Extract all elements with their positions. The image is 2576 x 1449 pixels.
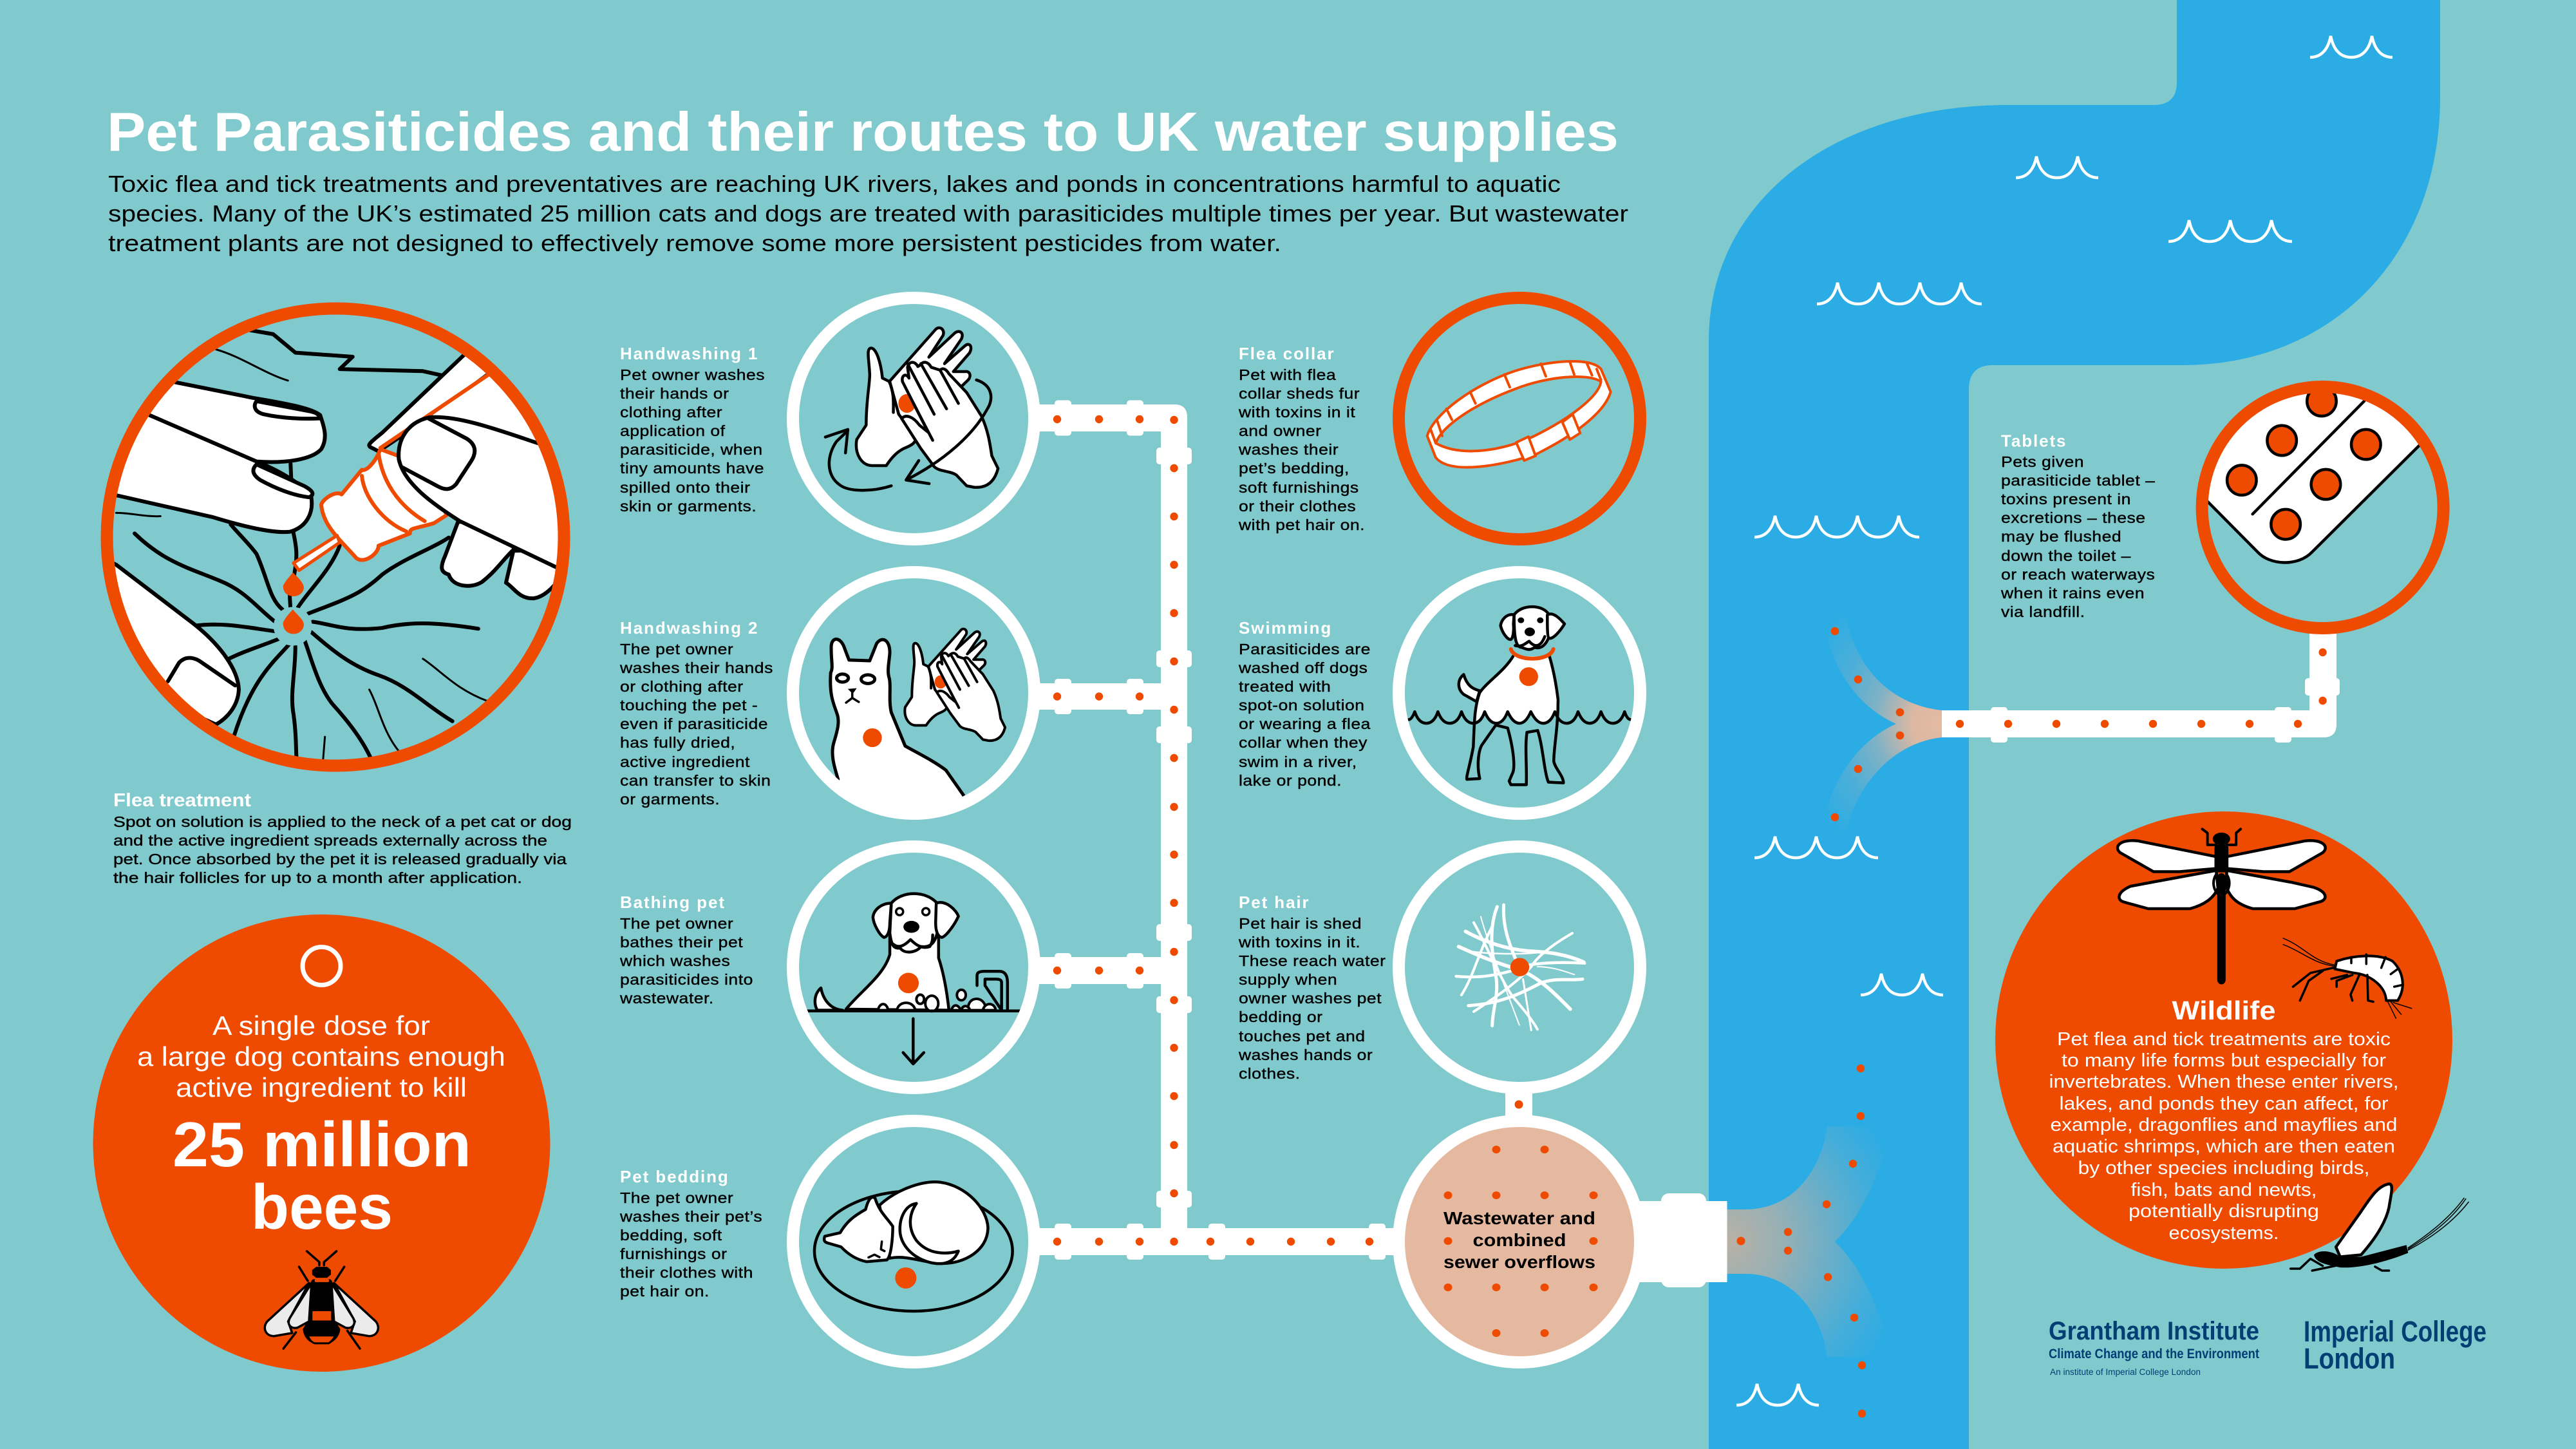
text: flea treatment: Flea treatment [113,790,251,811]
plume: tablets outfall [1819,610,1942,838]
ring: flea collar [1398,298,1641,540]
callout text: bees [251,1171,393,1242]
text: flea collar: pet’s bedding, [1239,460,1349,477]
text: flea treatment: Spot on solution is applied to the neck of a pet cat or dog [113,813,572,830]
wildlife text: by other species including birds, [2078,1158,2369,1179]
logo: Imperial College London: London [2304,1342,2395,1375]
panel: wastewater and combined sewer overflows [1398,1121,1727,1363]
text: bathing pet [619,893,753,1007]
text: bathing pet: which washes [619,952,730,970]
text: swimming: spot-on solution [1239,697,1365,714]
text: handwashing 1: application of [620,422,726,440]
ring: swimming [1398,572,1641,814]
wastewater tank [1398,1121,1641,1363]
text: tablets: Pets given [2001,453,2084,471]
text: pet bedding [619,1167,762,1300]
text: handwashing 1 [620,344,765,515]
wildlife text: fish, bats and newts, [2131,1180,2317,1200]
text: pet bedding: bedding, soft [620,1227,722,1244]
text: swimming: lake or pond. [1239,772,1342,790]
pipe network: pathways to wastewater [1030,401,1532,1260]
panel: handwashing 2 icon [793,572,1034,840]
text: flea collar: soft furnishings [1239,479,1359,497]
text: pet hair: touches pet and [1239,1028,1366,1045]
text: pet bedding: washes their pet’s [619,1208,762,1226]
text: tablets: when it rains even [2000,585,2145,602]
text: handwashing 2: Handwashing 2 [620,618,758,638]
ring: bathing pet [793,846,1034,1088]
ring: pet hair [1398,846,1641,1088]
text: handwashing 1: spilled onto their [620,479,750,497]
text: tablets: Tablets [2001,431,2067,451]
text: swimming: Parasiticides are [1239,641,1371,658]
text: handwashing 1: parasiticide, when [620,441,763,459]
text: tablets: parasiticide tablet – [2001,472,2155,489]
text: pet hair: clothes. [1239,1065,1301,1083]
icon: cat on bed [814,1182,1013,1311]
text: pet hair [1238,893,1386,1083]
text: pet hair: supply when [1239,971,1337,989]
text: tablets: or reach waterways [2001,566,2155,583]
text: swimming [1238,618,1371,790]
ring: handwashing 2 [793,572,1034,814]
text: handwashing 1: clothing after [620,404,722,421]
text: pet hair: washes hands or [1238,1046,1373,1064]
wildlife text: invertebrates. When these enter rivers, [2049,1072,2399,1092]
text: tablets [2000,431,2155,621]
text: flea collar: or their clothes [1239,498,1356,515]
text: pet hair: owner washes pet [1239,990,1382,1007]
callout text: 25 million [173,1109,471,1180]
river waves [1736,36,2393,1405]
panel: flea treatment illustration [94,308,589,766]
text: tablets: toxins present in [2001,491,2131,508]
text: handwashing 2: washes their hands [619,659,773,677]
text: flea collar [1238,344,1365,534]
callout text: active ingredient to kill [176,1072,467,1103]
wastewater label [1443,1208,1595,1272]
wildlife heading: Wildlife [2172,996,2275,1025]
text: flea collar: collar sheds fur [1239,385,1360,402]
wildlife text [2049,1029,2399,1244]
wildlife text: example, dragonflies and mayflies and [2050,1115,2398,1135]
text: flea treatment: pet. Once absorbed by the pet it is released gradually via [113,851,567,867]
text: bathing pet: parasiticides into [620,971,753,989]
pipe: tablets to river [1942,634,2340,743]
logo: Grantham Institute: Grantham Institute [2049,1317,2259,1345]
text: pet hair: Pet hair is shed [1239,915,1362,933]
intro text: Toxic flea and tick treatments and preventatives are reaching UK rivers, lakes and ponds in concentrations harmful to aquatic [108,171,1561,197]
text: pet hair: bedding or [1239,1009,1323,1026]
panel: bathing pet icon [793,846,1034,1088]
toxin dots [1443,1146,1598,1337]
ring: flea treatment [107,308,564,766]
text: pet bedding: pet hair on. [620,1283,710,1300]
text: pet hair: These reach water [1239,952,1386,970]
text: handwashing 2: even if parasiticide [620,715,768,733]
icon: hair tangle [1456,905,1584,1030]
panel: pet hair icon [1398,846,1641,1088]
logo: Grantham Institute: Climate Change and the Environment [2049,1347,2259,1361]
text: bathing pet: bathes their pet [620,934,743,951]
wildlife text: potentially disrupting [2129,1201,2319,1222]
panel: flea collar icon [1398,298,1641,540]
ring: pet bedding [793,1121,1034,1363]
text: pet hair: with toxins in it. [1238,934,1360,951]
callout text: a large dog contains enough [137,1041,505,1072]
text: pet bedding: furnishings or [620,1245,727,1263]
panel: 25 million bees callout [93,914,550,1372]
icon: bee [265,1251,378,1349]
wastewater label: sewer overflows [1443,1252,1595,1272]
wastewater label: combined [1473,1230,1566,1250]
text: flea collar: washes their [1238,441,1339,459]
intro text: treatment plants are not designed to effectively remove some more persistent pesticides from water. [108,230,1281,256]
text: handwashing 2: touching the pet - [620,697,758,714]
text: handwashing 2: active ingredient [620,753,750,771]
plume: wastewater outfall [1727,1065,1891,1417]
text: flea treatment: the hair follicles for up to a month after application. [113,869,522,886]
text: handwashing 2: The pet owner [620,641,733,658]
text: flea collar: with pet hair on. [1238,516,1365,534]
text: handwashing 1: skin or garments. [620,498,757,515]
icon: shrimp [2283,938,2412,1018]
text: flea treatment: and the active ingredient spreads externally across the [113,832,547,849]
icon: blister pack [2208,393,2420,564]
text: swimming: swim in a river, [1239,753,1357,771]
title: Pet Parasiticides and their routes to UK water supplies [107,102,1619,163]
wildlife text: ecosystems. [2168,1223,2279,1244]
text: swimming: washed off dogs [1238,659,1368,677]
wildlife text: lakes, and ponds they can affect, for [2059,1094,2389,1114]
text: bathing pet: The pet owner [620,915,733,933]
text: tablets: via landfill. [2001,603,2085,621]
text: pet hair: Pet hair [1239,893,1310,912]
panel: wildlife [1995,811,2468,1271]
text: handwashing 2: or garments. [620,791,720,808]
panel: tablets icon [2195,381,2450,634]
text: handwashing 1: Handwashing 1 [620,344,758,363]
text: flea collar: with toxins in it [1238,404,1355,421]
wildlife text: to many life forms but especially for [2062,1050,2386,1071]
text: handwashing 2: or clothing after [620,678,744,696]
icon: dog in bath [804,894,1023,1064]
ring: tablets [2202,386,2443,629]
callout text: A single dose for [212,1010,430,1041]
river [1709,0,2440,1449]
text: handwashing 2: can transfer to skin [620,772,771,790]
text: tablets: excretions – these [2001,509,2146,527]
text: flea treatment [113,790,572,886]
text: flea collar: and owner [1239,422,1322,440]
wastewater label: Wastewater and [1443,1208,1595,1228]
text: swimming: collar when they [1239,734,1368,752]
panel: pet bedding icon [793,1121,1034,1363]
text: handwashing 1: their hands or [620,385,729,402]
text: pet bedding: Pet bedding [620,1167,729,1186]
text: pet bedding: The pet owner [620,1189,733,1207]
wildlife text: aquatic shrimps, which are then eaten [2053,1136,2395,1157]
text: tablets: down the toilet – [2001,547,2131,565]
panel: handwashing 1 icon [793,298,1034,540]
callout text [137,1010,505,1242]
icon: collar [1427,361,1611,468]
text: handwashing 1: Pet owner washes [620,366,765,384]
ring: handwashing 1 [793,298,1034,540]
icon: dog in water [1409,607,1631,794]
outfall pipe [1635,1193,1727,1287]
logo: Imperial College London: Imperial College [2304,1315,2487,1348]
icon: mayfly [2291,1184,2468,1271]
logo: Imperial College London [2304,1315,2487,1375]
logo: Grantham Institute: An institute of Imperial College London [2050,1367,2201,1377]
text: tablets: may be flushed [2001,528,2121,545]
intro text: species. Many of the UK’s estimated 25 million cats and dogs are treated with parasiticides multiple times per year. But wastewater [108,200,1628,227]
text: swimming: or wearing a flea [1239,715,1371,733]
text: flea collar: Flea collar [1239,344,1335,363]
text: bathing pet: wastewater. [619,990,714,1007]
panel: swimming icon [1398,572,1641,814]
text: pet bedding: their clothes with [620,1264,753,1282]
icon: cat and hands [829,627,1007,808]
text: handwashing 2: has fully dried, [620,734,735,752]
text: handwashing 1: tiny amounts have [620,460,764,477]
wildlife text: Pet flea and tick treatments are toxic [2057,1029,2391,1050]
logo: Grantham Institute [2049,1317,2259,1377]
text: flea collar: Pet with flea [1239,366,1336,384]
icon: dose ring [303,947,341,985]
text: swimming: treated with [1239,678,1331,696]
text: bathing pet: Bathing pet [620,893,726,912]
icon: dragonfly [2118,829,2326,985]
text: handwashing 2 [619,618,773,808]
icon: washing hands [825,328,998,490]
text: swimming: Swimming [1239,618,1332,638]
intro text [108,171,1628,256]
